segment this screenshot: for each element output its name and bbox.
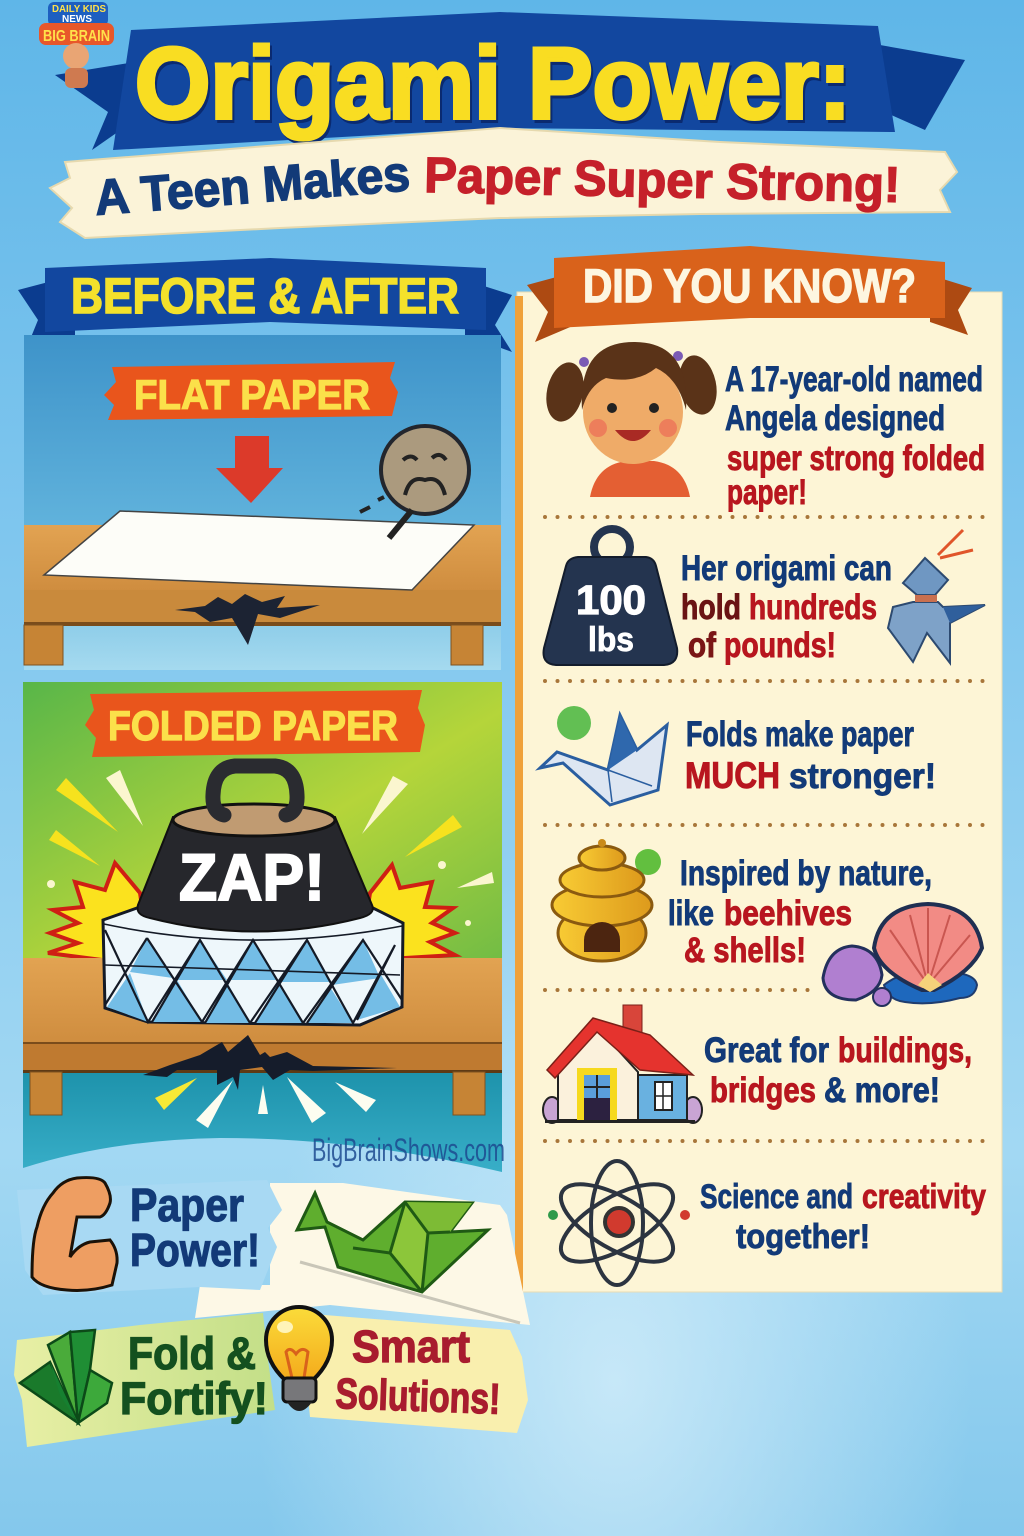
fact 5: & more! xyxy=(824,1071,940,1110)
sticker: fold and fortify: Fold & xyxy=(128,1328,256,1379)
title banner xyxy=(55,12,965,150)
starburst left xyxy=(48,863,150,960)
sticker: smart solutions xyxy=(266,1307,528,1433)
icon: zap weight: ZAP! xyxy=(179,840,325,914)
fact 5 xyxy=(543,1005,972,1123)
crack xyxy=(175,594,320,645)
sticker: smart solutions: Smart xyxy=(352,1321,470,1372)
fact 3: Folds make paper xyxy=(686,715,914,754)
fact 3: stronger! xyxy=(789,757,936,796)
icon: flexed arm xyxy=(32,1178,117,1290)
folded paper block xyxy=(103,908,403,1025)
table xyxy=(24,525,501,665)
icon: girl xyxy=(541,342,722,497)
fact 4: & shells! xyxy=(684,931,806,970)
subtitle ribbon: Paper Super Strong! xyxy=(424,147,901,213)
fact 4: Inspired by nature, xyxy=(680,854,932,893)
fact 1: paper! xyxy=(727,473,807,512)
title text: Origami Power: xyxy=(135,28,851,140)
fact 4: like xyxy=(668,894,714,933)
fact 2: hold xyxy=(681,588,741,627)
starburst right xyxy=(360,865,455,958)
icon: 100 lbs weight: lbs xyxy=(588,621,634,659)
icon: green fold fan xyxy=(20,1330,112,1423)
crack xyxy=(143,1035,397,1090)
fact 2: pounds! xyxy=(724,626,836,665)
fact 5: buildings, xyxy=(838,1031,972,1070)
fact 6: together! xyxy=(736,1218,870,1256)
icon: beehive xyxy=(552,839,661,961)
panel: flat paper xyxy=(24,335,501,670)
panel: before and after heading xyxy=(18,258,512,352)
icon: shells xyxy=(823,904,982,1006)
folded paper label xyxy=(85,690,425,757)
fact 5: bridges xyxy=(710,1071,816,1110)
icon: 100 lbs weight xyxy=(544,529,677,665)
logo: BIG BRAIN xyxy=(43,28,110,45)
fact 2: of xyxy=(688,626,716,665)
icon: sad face xyxy=(360,426,469,538)
fact 5: Great for xyxy=(704,1031,829,1070)
fact 4 xyxy=(552,839,982,1006)
fact 3 xyxy=(540,706,936,805)
did you know banner: DID YOU KNOW? xyxy=(583,259,916,312)
flat paper sheet xyxy=(44,511,474,590)
watermark: BigBrainShows.com xyxy=(312,1132,505,1168)
fact 4: beehives xyxy=(724,894,852,933)
water floor xyxy=(23,1060,502,1172)
sticker: smart solutions: Solutions! xyxy=(335,1370,501,1424)
panel: did you know xyxy=(515,246,1002,1292)
splashes xyxy=(155,1077,376,1128)
sticker: fold and fortify: Fortify! xyxy=(120,1373,268,1424)
heading: before and after: BEFORE & AFTER xyxy=(71,268,459,324)
icon: down arrow xyxy=(216,436,283,503)
fact 6: Science and xyxy=(700,1178,853,1216)
table xyxy=(23,958,502,1115)
icon: atom xyxy=(548,1161,690,1285)
burst lines xyxy=(47,770,494,926)
icon: paper crane xyxy=(540,706,667,805)
icon: zap weight xyxy=(138,766,373,932)
folded paper label: FOLDED PAPER xyxy=(108,702,398,749)
fact 6: creativity xyxy=(862,1178,986,1216)
fact 2: hundreds xyxy=(749,588,877,627)
logo: DAILY KIDS xyxy=(52,4,106,15)
fact 2 xyxy=(544,529,985,665)
fact 3: MUCH xyxy=(685,755,780,796)
sticker: green origami bird xyxy=(195,1183,530,1325)
logo: NEWS xyxy=(62,14,92,25)
fact 1: Angela designed xyxy=(725,399,945,438)
icon: light bulb xyxy=(266,1307,332,1411)
sticker: paper power: Power! xyxy=(130,1224,260,1276)
subtitle ribbon xyxy=(50,128,957,238)
icon: origami figure xyxy=(888,530,985,663)
fact 6 xyxy=(548,1161,986,1285)
fact 2: Her origami can xyxy=(681,549,892,588)
fact 1 xyxy=(541,342,985,512)
did you know banner xyxy=(527,246,972,342)
subtitle text: A Teen Makes xyxy=(92,145,412,226)
panel: folded paper xyxy=(23,682,502,1172)
sticker: paper power xyxy=(17,1178,282,1295)
flat paper label: FLAT PAPER xyxy=(134,371,370,418)
logo xyxy=(39,2,114,88)
icon: 100 lbs weight: 100 xyxy=(576,577,646,623)
sticker: paper power: Paper xyxy=(130,1179,244,1231)
icon: house xyxy=(543,1005,702,1123)
sticker: fold and fortify xyxy=(14,1313,275,1447)
